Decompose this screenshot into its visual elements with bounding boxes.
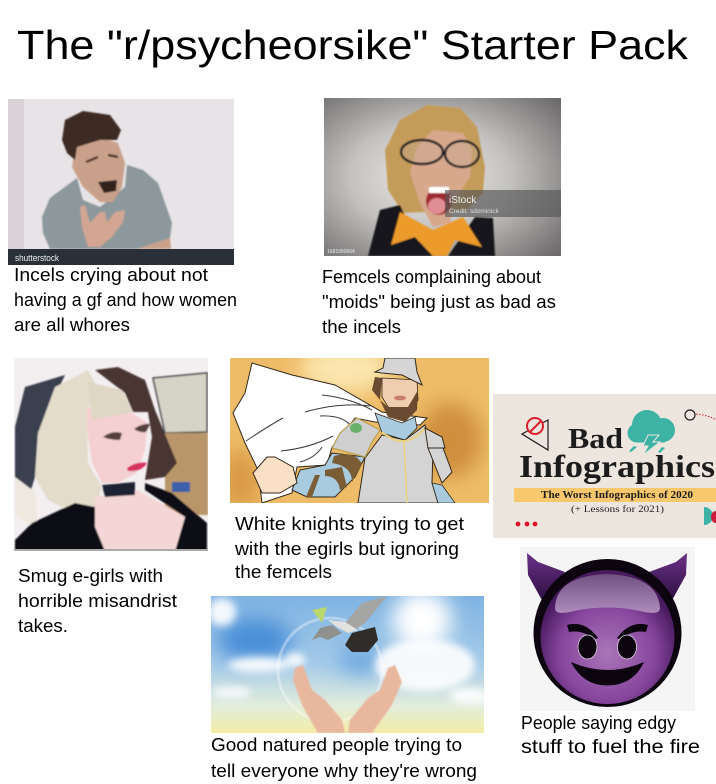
caption: edgy people: stuff to fuel the fire <box>521 736 700 758</box>
knight hand <box>253 457 297 493</box>
caption: incels: Incels crying about not <box>14 265 208 285</box>
white cape <box>233 363 427 503</box>
panel: bad infographics cover: The Worst Infographics of 2020 <box>541 490 693 501</box>
caption: femcels: Femcels complaining about <box>322 267 541 287</box>
caption: good natured people: tell everyone why they're wrong <box>211 761 477 781</box>
armored knight body <box>375 413 417 440</box>
panel: bad infographics cover <box>493 394 716 538</box>
caption: incels <box>14 265 237 335</box>
caption: e-girls: Smug e-girls with <box>18 566 163 586</box>
caption: femcels: the incels <box>322 317 401 337</box>
iStock watermark <box>449 196 499 213</box>
devil brows <box>567 624 648 639</box>
caption: white knights: White knights trying to get <box>235 514 464 534</box>
panel: e-girl photo <box>14 358 208 551</box>
open hands <box>293 665 402 733</box>
caption: femcels <box>322 267 556 337</box>
panel: white knight cartoon <box>230 358 489 503</box>
devil smile <box>572 663 643 685</box>
caption: white knights: with the egirls but ignoring <box>234 539 459 559</box>
caption: edgy people <box>521 713 700 758</box>
icon: storm cloud <box>628 410 675 455</box>
caption: femcels: "moids" being just as bad as <box>322 292 556 312</box>
panel: screaming woman photo: 1683350664 <box>327 249 355 255</box>
panel: crying man photo <box>8 99 234 265</box>
caption: edgy people: People saying edgy <box>521 713 676 733</box>
shutterstock watermark: shutterstock <box>15 253 59 263</box>
panel: bad infographics cover: Infographics <box>519 448 715 484</box>
iStock watermark: iStock <box>449 195 477 206</box>
caption: e-girls: takes. <box>18 616 68 636</box>
caption: good natured people <box>211 735 477 781</box>
iStock watermark: Credit: sdominick <box>449 208 500 215</box>
dove <box>312 596 387 652</box>
caption: e-girls: horrible misandrist <box>18 591 177 611</box>
devil horns <box>527 553 687 602</box>
caption: white knights <box>234 514 464 582</box>
half circles <box>704 507 716 525</box>
knight head <box>372 358 422 422</box>
panel: purple devil emoji <box>520 547 695 711</box>
icon: circle and dotted line <box>685 410 716 420</box>
face highlight <box>555 574 660 613</box>
title: The "r/psycheorsike" Starter Pack <box>17 22 689 68</box>
panel: bad infographics cover: Bad <box>568 423 623 455</box>
caption: white knights: the femcels <box>235 562 332 582</box>
panel: bad infographics cover: (+ Lessons for 2021) <box>571 504 664 515</box>
panel: dove and hands photo <box>208 590 490 733</box>
caption: incels: having a gf and how women <box>14 290 237 310</box>
sun <box>392 590 452 650</box>
caption: good natured people: Good natured people trying to <box>211 735 462 755</box>
panel: screaming woman photo <box>324 98 561 256</box>
icon: no sign and triangle <box>522 418 548 450</box>
caption: incels: are all whores <box>14 315 130 335</box>
red dots <box>516 522 537 526</box>
devil eyes <box>578 635 636 659</box>
caption: e-girls <box>18 566 177 636</box>
